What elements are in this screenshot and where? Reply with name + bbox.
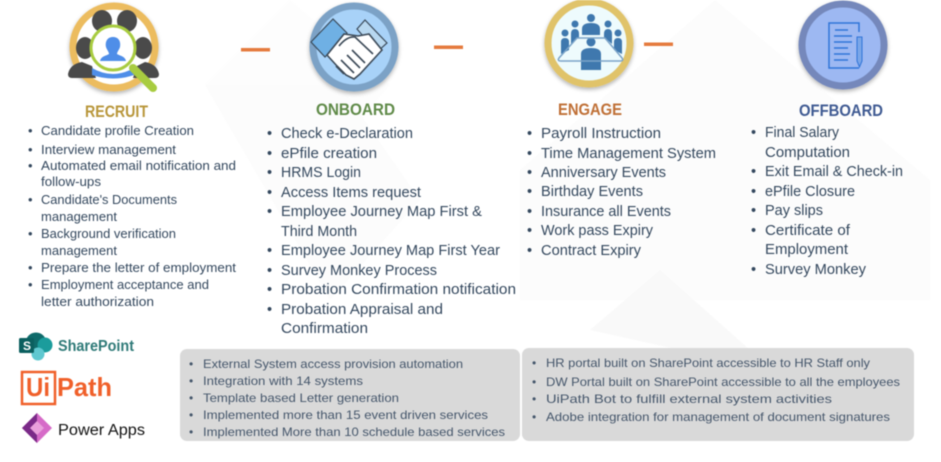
- list: offboard: •: [751, 164, 756, 180]
- list: recruit: •: [28, 260, 33, 275]
- list: engage: •: [527, 204, 532, 220]
- list: engage: •: [527, 243, 532, 259]
- list: onboard: Check e-Declaration: [281, 126, 413, 142]
- list: onboard: •: [267, 185, 272, 201]
- list: onboard: [267, 126, 516, 337]
- list: onboard: •: [267, 302, 272, 318]
- list: recruit: Prepare the letter of employment: [41, 260, 236, 275]
- panel: left implementation summary: •: [189, 425, 193, 439]
- heading: onboard: ONBOARD: [316, 100, 395, 119]
- panel: right implementation summary: •: [532, 356, 536, 370]
- logo: SharePoint: SharePoint: [58, 338, 134, 355]
- panel: left implementation summary: External System access provision automation: [203, 357, 463, 371]
- list: offboard: [751, 125, 903, 278]
- list: recruit: management: [41, 209, 117, 224]
- list: recruit: Automated email notification and: [41, 158, 236, 173]
- panel: right implementation summary: HR portal built on SharePoint accessible to HR Staff only: [546, 356, 870, 370]
- panel: left implementation summary: Implemented more than 15 event driven services: [203, 408, 488, 422]
- logo: SharePoint: S: [23, 339, 31, 353]
- panel: left implementation summary: Implemented More than 10 schedule based services: [203, 425, 505, 439]
- list: onboard: Probation Confirmation notification: [281, 282, 516, 298]
- list: offboard: Exit Email & Check-in: [765, 164, 903, 180]
- icon: recruit: [68, 6, 159, 88]
- list: recruit: letter authorization: [41, 294, 154, 309]
- list: onboard: Confirmation: [281, 321, 368, 337]
- panel: right implementation summary: [522, 348, 914, 441]
- panel: right implementation summary: DW Portal built on SharePoint accessible to all the employees: [546, 375, 900, 389]
- heading: offboard: OFFBOARD: [799, 101, 883, 120]
- list: recruit: Candidate profile Creation: [41, 123, 194, 138]
- icon: onboard: [311, 6, 395, 88]
- list: onboard: •: [267, 126, 272, 142]
- panel: left implementation summary: •: [189, 374, 193, 388]
- icon: engage: [548, 2, 630, 84]
- list: recruit: [28, 123, 236, 309]
- list: offboard: •: [751, 262, 756, 278]
- list: onboard: Probation Appraisal and: [281, 302, 443, 318]
- list: engage: Insurance all Events: [541, 204, 671, 220]
- list: onboard: •: [267, 243, 272, 259]
- list: recruit: management: [41, 243, 117, 258]
- panel: left implementation summary: Integration with 14 systems: [203, 374, 363, 388]
- connector: engage to offboard: [644, 42, 673, 46]
- list: offboard: Survey Monkey: [765, 262, 867, 278]
- list: offboard: Employment: [765, 242, 848, 258]
- logo: UiPath: Ui: [26, 372, 50, 402]
- panel: left implementation summary: •: [189, 391, 193, 405]
- list: onboard: •: [267, 282, 272, 298]
- list: onboard: Third Month: [281, 224, 357, 240]
- list: onboard: •: [267, 165, 272, 181]
- list: offboard: Pay slips: [765, 203, 823, 219]
- panel: left implementation summary: •: [189, 357, 193, 371]
- list: engage: •: [527, 223, 532, 239]
- list: recruit: •: [28, 226, 33, 241]
- list: engage: •: [527, 165, 532, 181]
- list: recruit: •: [28, 158, 33, 173]
- logo: UiPath: Path: [57, 372, 112, 402]
- heading: engage: ENGAGE: [558, 100, 622, 119]
- list: recruit: •: [28, 277, 33, 292]
- list: offboard: •: [751, 223, 756, 239]
- list: engage: Time Management System: [541, 146, 716, 162]
- panel: left implementation summary: •: [189, 408, 193, 422]
- logo: Power Apps: Power Apps: [58, 422, 145, 439]
- list: offboard: Certificate of: [765, 223, 851, 239]
- panel: right implementation summary: •: [532, 392, 536, 406]
- panel: right implementation summary: •: [532, 410, 536, 424]
- panel: right implementation summary: UiPath Bot to fulfill external system activities: [546, 392, 832, 406]
- list: offboard: Final Salary: [765, 125, 840, 141]
- list: engage: •: [527, 184, 532, 200]
- panel: left implementation summary: [180, 349, 520, 441]
- list: recruit: •: [28, 142, 33, 157]
- list: recruit: Interview management: [41, 142, 176, 157]
- list: onboard: •: [267, 263, 272, 279]
- heading: recruit: RECRUIT: [85, 102, 149, 121]
- list: recruit: follow-ups: [41, 174, 102, 189]
- list: engage: •: [527, 146, 532, 162]
- list: onboard: •: [267, 204, 272, 220]
- logo: UiPath: [22, 372, 112, 404]
- logo: Power Apps: [22, 413, 145, 443]
- list: engage: Work pass Expiry: [541, 223, 654, 239]
- list: engage: [527, 126, 716, 259]
- panel: right implementation summary: Adobe integration for management of document signatures: [546, 410, 890, 424]
- list: offboard: •: [751, 125, 756, 141]
- list: recruit: •: [28, 123, 33, 138]
- icon: offboard: [802, 4, 884, 86]
- list: onboard: ePfile creation: [281, 146, 377, 162]
- panel: left implementation summary: Template based Letter generation: [203, 391, 399, 405]
- list: onboard: Employee Journey Map First &: [281, 204, 482, 220]
- connector: onboard to engage: [434, 46, 463, 49]
- list: recruit: Candidate's Documents: [41, 192, 177, 207]
- list: onboard: Employee Journey Map First Year: [281, 243, 500, 259]
- list: onboard: •: [267, 146, 272, 162]
- list: engage: Payroll Instruction: [541, 126, 661, 142]
- panel: right implementation summary: •: [532, 375, 536, 389]
- list: onboard: HRMS Login: [281, 165, 361, 181]
- list: offboard: •: [751, 203, 756, 219]
- list: recruit: Employment acceptance and: [41, 277, 209, 292]
- connector: recruit to onboard: [241, 48, 270, 52]
- list: offboard: •: [751, 184, 756, 200]
- list: recruit: Background verification: [41, 226, 176, 241]
- list: recruit: •: [28, 192, 33, 207]
- list: engage: Contract Expiry: [541, 243, 642, 259]
- list: offboard: Computation: [765, 145, 850, 161]
- list: engage: Anniversary Events: [541, 165, 666, 181]
- list: onboard: Survey Monkey Process: [281, 263, 437, 279]
- list: offboard: ePfile Closure: [765, 184, 855, 200]
- list: engage: •: [527, 126, 532, 142]
- logo: SharePoint: [19, 332, 134, 360]
- list: engage: Birthday Events: [541, 184, 643, 200]
- list: onboard: Access Items request: [281, 185, 421, 201]
